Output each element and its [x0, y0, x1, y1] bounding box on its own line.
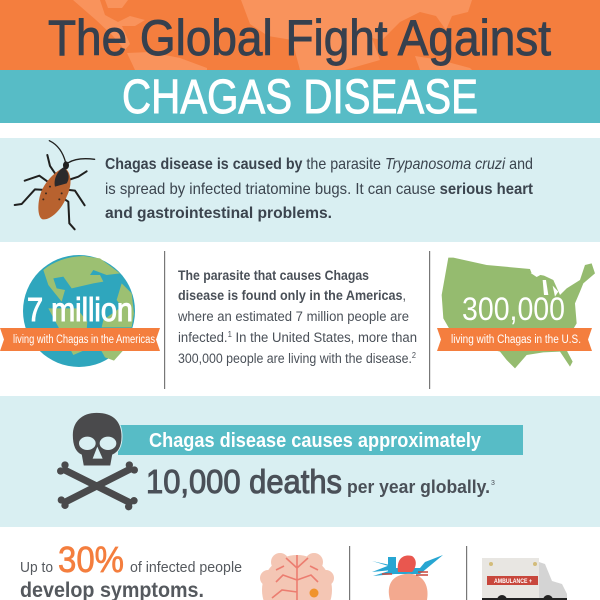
- footnote mark: 3: [491, 480, 495, 487]
- icon: globe: [23, 255, 135, 367]
- ribbon: Americas: [0, 328, 160, 351]
- text block: where the parasite is found: disease is found only in the Americas,: [178, 288, 406, 303]
- text block: where the parasite is found: where an estimated 7 million people are: [177, 309, 409, 324]
- divider left: [164, 251, 165, 389]
- world map background: [73, 0, 472, 70]
- ribbon label: living with Chagas in the U.S.: [451, 334, 581, 346]
- panel: deaths: [0, 396, 600, 527]
- panel: 7 million globe: [0, 255, 160, 367]
- teal bar: [118, 425, 523, 455]
- description text: is spread by infected triatomine bugs. It can cause serious heart: [105, 181, 534, 198]
- text block: symptoms: of infected people: [130, 559, 242, 576]
- text block: where the parasite is found: The parasite that causes Chagas: [178, 268, 369, 283]
- stat: 30%: 30%: [58, 539, 124, 580]
- description text: [105, 156, 534, 222]
- icon: skull and crossbones: [57, 412, 138, 510]
- stat: 300,000: 300,000: [462, 291, 565, 327]
- teal title band: [0, 70, 600, 123]
- divider: [466, 546, 467, 600]
- bar heading: Chagas disease causes approximately: [149, 430, 482, 452]
- icon: ambulance: AMBULANCE +: [494, 579, 532, 585]
- panel: 300,000 US map: [437, 258, 595, 368]
- text block: where the parasite is found: 2: [412, 351, 417, 360]
- text block: where the parasite is found: In the United States, more than: [232, 330, 417, 345]
- panel: what causes Chagas: [0, 138, 600, 242]
- icon: heart: [372, 555, 443, 600]
- text block: where the parasite is found: 1: [228, 330, 232, 339]
- ribbon label: living with Chagas in the Americas: [13, 334, 155, 346]
- divider right: [429, 251, 430, 389]
- title line 2: CHAGAS DISEASE: [122, 71, 478, 124]
- description text: and gastrointestinal problems.: [105, 205, 332, 222]
- text block: where the parasite is found: infected.: [178, 330, 229, 345]
- text block: symptoms: Up to: [20, 559, 53, 576]
- divider: [349, 546, 350, 600]
- icon: ambulance: [482, 558, 567, 600]
- text block: where the parasite is found: 300,000 people are living with the disease.: [178, 351, 433, 366]
- icon: brain: [260, 553, 334, 600]
- icon: US map: [442, 258, 595, 368]
- text block: symptoms: [20, 539, 242, 600]
- header: title banner: [0, 0, 600, 124]
- description text: Chagas disease is caused by the parasite Trypanosoma cruzi and: [105, 156, 533, 173]
- title line 1: The Global Fight Against: [48, 10, 551, 66]
- deaths stat: 10,000 deaths: [146, 463, 342, 500]
- ribbon: US: [437, 328, 592, 351]
- icon: triatomine bug: [15, 141, 95, 229]
- deaths stat suffix: per year globally.: [347, 477, 490, 497]
- stat: 7 million: 7 million: [27, 291, 133, 328]
- text block: where the parasite is found: [177, 268, 417, 366]
